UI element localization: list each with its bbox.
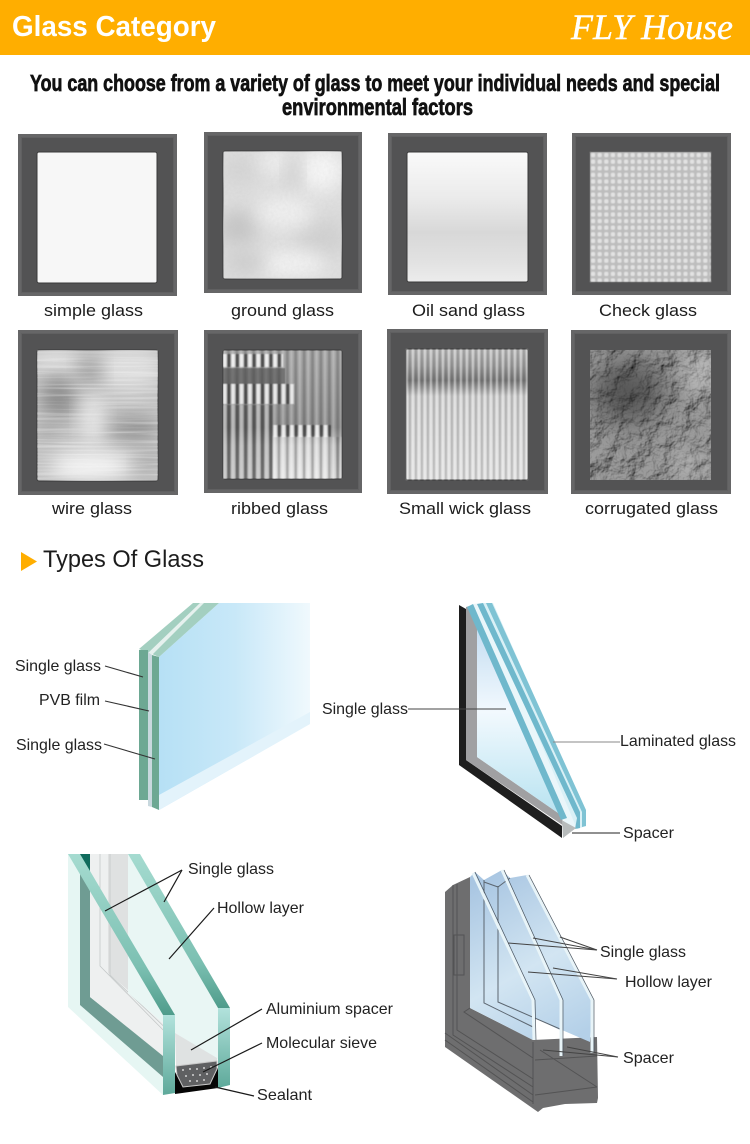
title: Glass Category <box>12 11 216 43</box>
label: wire glass: wire glass <box>51 499 132 518</box>
labels <box>188 861 394 1104</box>
brand name: FLY House <box>570 7 733 47</box>
aluminium frame <box>445 877 598 1112</box>
leader lines <box>508 937 618 1057</box>
leader lines <box>105 870 262 1096</box>
black sealant <box>175 1068 218 1094</box>
panel: ribbed glass window <box>204 330 362 518</box>
subtitle text <box>30 70 720 120</box>
header bar <box>0 0 750 55</box>
glass panes <box>470 872 533 1040</box>
labels: Spacer <box>623 1050 675 1067</box>
labels: Sealant <box>257 1087 313 1104</box>
panel: small wick glass window <box>387 329 548 518</box>
diagram: triple glazed window profile <box>445 870 713 1112</box>
panel: corrugated glass window <box>571 330 731 518</box>
labels: Laminated glass <box>620 733 736 750</box>
labels: Spacer <box>623 825 675 842</box>
labels <box>322 701 736 842</box>
subtitle text: environmental factors <box>282 94 473 120</box>
diagram: double glazed unit <box>68 854 394 1104</box>
panel: check glass window <box>572 133 731 320</box>
diagram: insulated laminated glass <box>322 603 736 842</box>
label: small wick glass: Small wick glass <box>399 499 531 518</box>
label: ground glass: ground glass <box>231 301 334 320</box>
panel: simple glass window <box>18 134 177 320</box>
labels: Hollow layer <box>625 974 713 991</box>
diagram: laminated glass <box>15 603 310 810</box>
panel: wire glass window <box>18 330 178 518</box>
labels <box>15 658 102 754</box>
panel: ground glass window <box>204 132 362 320</box>
label: check glass: Check glass <box>599 301 697 320</box>
molecular sieve <box>176 1061 217 1087</box>
leader lines <box>408 709 620 833</box>
label: corrugated glass: corrugated glass <box>585 499 718 518</box>
icon: orange triangle <box>21 552 37 571</box>
label: simple glass: simple glass <box>44 301 143 320</box>
label: oil sand glass: Oil sand glass <box>412 301 525 320</box>
panel: oil sand glass window <box>388 133 547 320</box>
leader lines <box>104 666 155 759</box>
labels: Single glass <box>188 861 274 878</box>
labels: Aluminium spacer <box>266 1001 394 1018</box>
labels <box>600 944 713 1067</box>
section heading: types of glass: Types Of Glass <box>43 546 204 573</box>
label: ribbed glass: ribbed glass <box>231 499 328 518</box>
labels: Hollow layer <box>217 900 305 917</box>
labels: PVB film <box>39 692 100 709</box>
labels: Single glass <box>15 658 101 675</box>
labels: Single glass <box>16 737 102 754</box>
labels: Molecular sieve <box>266 1035 377 1052</box>
labels: Single glass <box>600 944 686 961</box>
labels: Single glass <box>322 701 408 718</box>
